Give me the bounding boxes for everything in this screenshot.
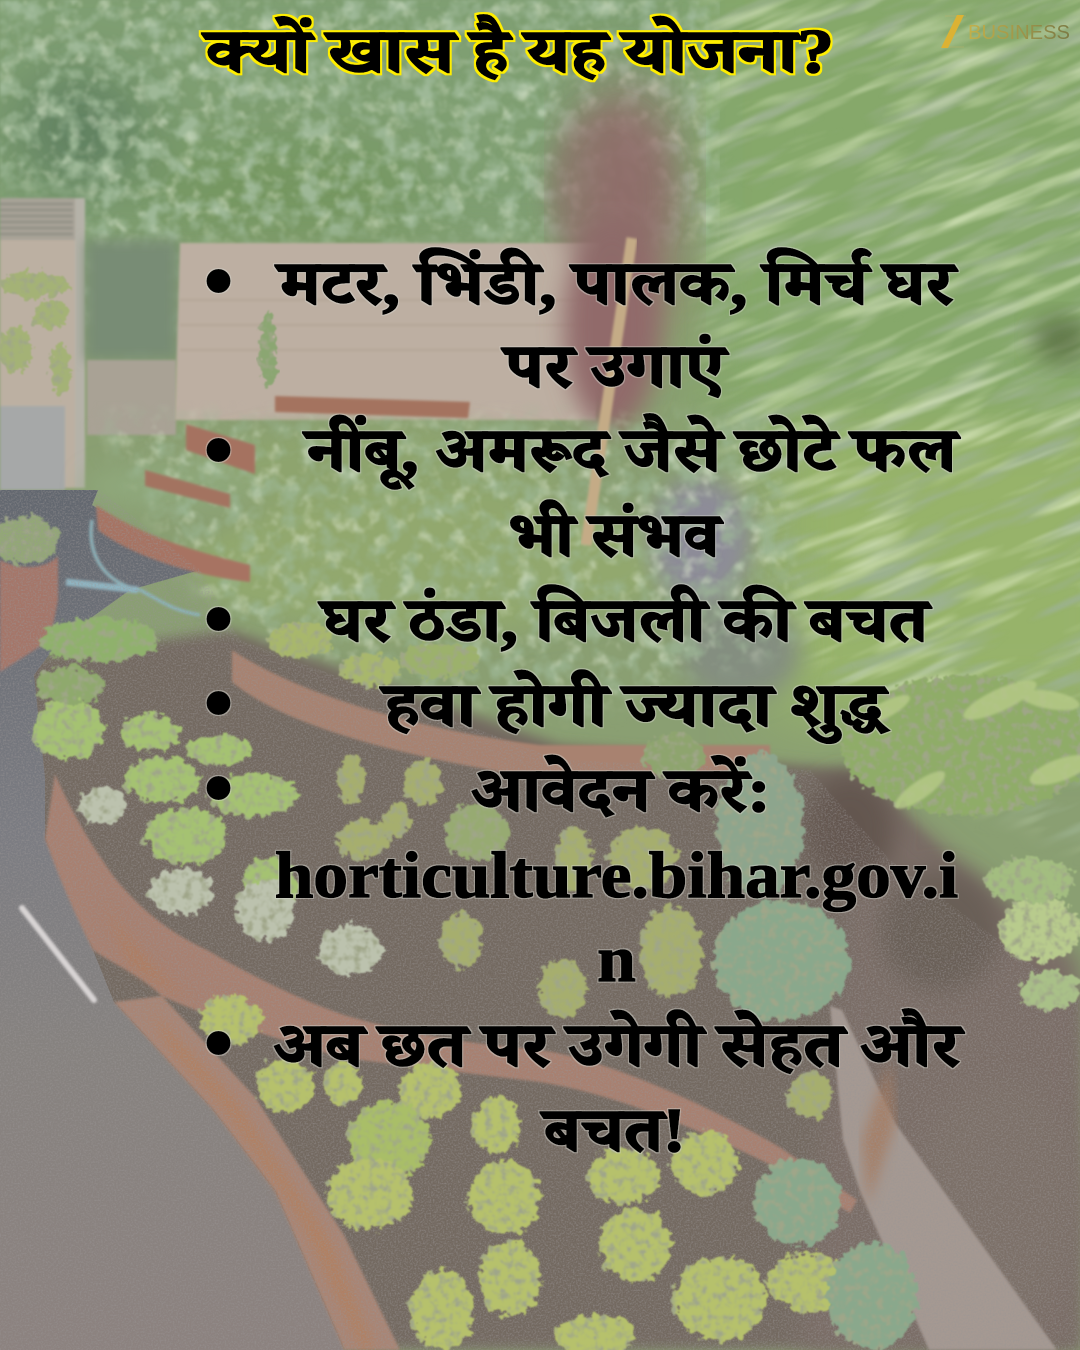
- bullet 1: [206, 247, 959, 401]
- bullet 6: [206, 1009, 965, 1165]
- background: right soil dark patches: [805, 775, 1080, 1320]
- background: bright green plants: [32, 618, 480, 912]
- brand logo: Z BUSINESS: BUSINESS: [968, 21, 1070, 44]
- bullet 6: अब छत पर उगेगी सेहत और: [274, 1009, 965, 1080]
- bullet 4: [206, 670, 890, 744]
- background: soil grain: [0, 490, 1080, 1350]
- background: left planter: [0, 556, 58, 672]
- bullet list: [206, 247, 965, 1165]
- background: white hose streak: [22, 908, 94, 1000]
- title: क्यों खास है यह योजना?: [201, 15, 834, 86]
- background: right grey band: [830, 1006, 1057, 1350]
- background: garden soil: [0, 630, 1080, 1350]
- background: yellow plants: [200, 995, 849, 1350]
- bullet 4: हवा होगी ज्यादा शुद्ध: [380, 670, 890, 744]
- brand logo: Z BUSINESS: [941, 15, 1070, 48]
- background: rust bed edges: [45, 396, 857, 1350]
- bullet 5: [206, 755, 958, 996]
- background: large lower right leaves: [840, 675, 1080, 1010]
- background: maroon shrub: [580, 80, 670, 340]
- background: gravel path: [0, 490, 344, 1350]
- background: front bed band: [45, 774, 857, 1213]
- background: wooden stake: [586, 238, 632, 545]
- background: lower long band: [114, 996, 400, 1350]
- background: gap behind wall: [85, 240, 178, 360]
- background: light leaves over the lower hedge: [857, 673, 1080, 815]
- background: silver plants: [79, 787, 382, 975]
- background: blurred colour masses: [0, 0, 1080, 720]
- background: hose: [66, 520, 200, 615]
- background: terrace plants behind: [85, 426, 800, 700]
- background: vine on left wall: [0, 271, 70, 398]
- bullet 3: घर ठंडा, बिजली की बचत: [318, 585, 932, 655]
- background: terrace texture: [102, 414, 806, 718]
- background: left wall: [0, 198, 85, 490]
- bullet 2: [206, 415, 960, 570]
- bullet 1: मटर, भिंडी, पालक, मिर्च घर: [274, 247, 959, 318]
- background: rust highlights: [105, 905, 375, 1350]
- bullet 1: पर उगाएं: [501, 333, 729, 401]
- bullet 2: भी संभव: [509, 500, 723, 570]
- background: blue-green plants: [713, 753, 918, 1349]
- background: tree foliage texture: [0, 0, 720, 294]
- background: back wall: [175, 243, 600, 420]
- bullet 6: बचत!: [540, 1097, 686, 1165]
- bullet 2: नींबू, अमरूद जैसे छोटे फल: [303, 415, 960, 489]
- background: hedge streak texture: [694, 0, 1080, 850]
- bullet 5: horticulture.bihar.gov.i: [275, 838, 958, 912]
- bullet 5: n: [597, 922, 636, 996]
- background: shoot on back wall: [259, 312, 277, 388]
- bullet 5: आवेदन करें:: [472, 755, 770, 825]
- background: olive plants: [337, 734, 832, 1119]
- background: maroon shrub over wall: [548, 110, 668, 430]
